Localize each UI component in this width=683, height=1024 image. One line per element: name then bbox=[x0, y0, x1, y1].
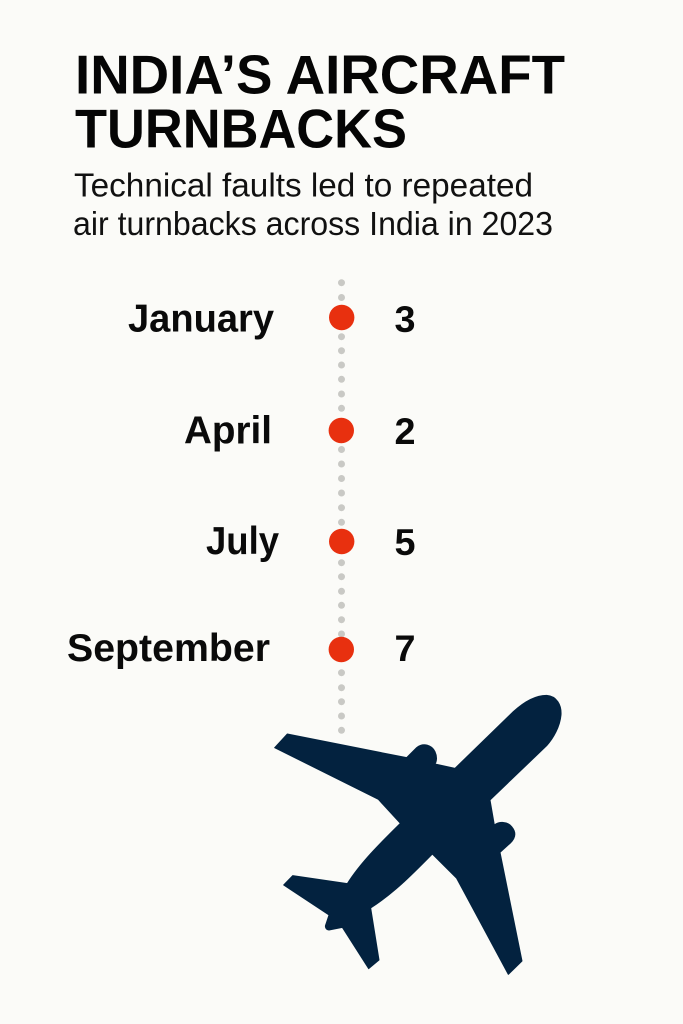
title bbox=[75, 44, 565, 160]
row: April, 2 bbox=[184, 410, 416, 452]
row: September, 7: 7 bbox=[394, 628, 416, 669]
row: January, 3: January bbox=[128, 298, 274, 341]
row: April, 2: April bbox=[184, 410, 272, 452]
title: INDIA’S AIRCRAFT bbox=[75, 44, 565, 106]
icon: airplane silhouette bbox=[275, 695, 561, 974]
row: January, 3: 3 bbox=[394, 299, 416, 340]
subtitle: air turnbacks across India in 2023 bbox=[73, 205, 553, 242]
row: April, 2: 2 bbox=[394, 411, 416, 452]
row: January, 3 bbox=[128, 298, 416, 341]
dotted timeline bbox=[338, 279, 345, 734]
row: September, 7 bbox=[67, 627, 416, 670]
row: July, 5 bbox=[206, 520, 416, 563]
row: July, 5: 5 bbox=[394, 522, 416, 563]
subtitle bbox=[73, 167, 553, 242]
row: September, 7: September bbox=[67, 627, 270, 670]
subtitle: Technical faults led to repeated bbox=[74, 167, 533, 204]
title: TURNBACKS bbox=[75, 98, 407, 160]
row: July, 5: July bbox=[206, 520, 279, 563]
